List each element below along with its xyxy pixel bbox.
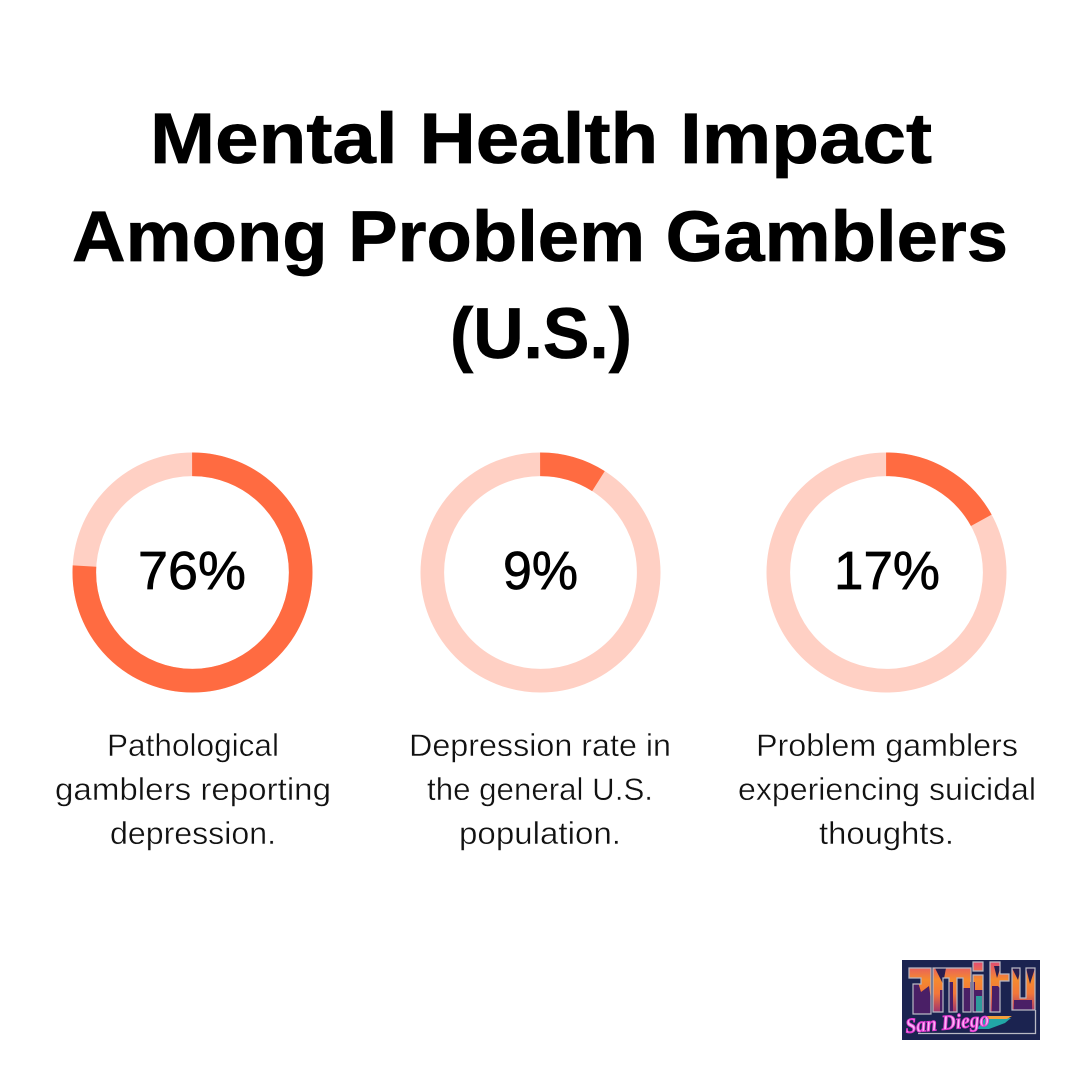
caption: depression rate	[409, 727, 671, 851]
title	[72, 100, 1008, 374]
logo outer frame line	[918, 1010, 1036, 1034]
title: Mental Health Impact	[150, 100, 932, 179]
logo beach	[977, 1018, 1011, 1029]
caption: depression rate: Depression rate in	[409, 727, 671, 763]
caption: pathological gamblers: depression.	[110, 815, 276, 851]
logo: Amity San Diego	[902, 960, 1040, 1040]
donut chart: 76%	[84, 464, 301, 681]
title: (U.S.)	[450, 295, 632, 374]
title: Among Problem Gamblers	[72, 198, 1008, 277]
donut chart: 17%	[778, 464, 995, 681]
logo script wordmark: San Diego	[904, 1007, 990, 1038]
panel: pathological gamblers 76%	[55, 464, 331, 851]
caption: pathological gamblers: Pathological	[107, 727, 279, 763]
value: 9%: 9%	[503, 541, 578, 601]
panel: general population 9%	[409, 464, 671, 851]
caption: suicidal thoughts: Problem gamblers	[756, 727, 1018, 763]
caption: pathological gamblers	[55, 727, 331, 851]
caption: pathological gamblers: gamblers reporting	[55, 771, 331, 807]
caption: depression rate: population.	[459, 815, 621, 851]
panel: suicidal thoughts 17%	[738, 464, 1036, 851]
caption: suicidal thoughts: experiencing suicidal	[738, 771, 1036, 807]
donut chart: 9%	[432, 464, 649, 681]
caption: depression rate: the general U.S.	[427, 771, 653, 807]
value: 76%: 76%	[138, 541, 246, 601]
value: 17%: 17%	[834, 541, 940, 601]
caption: suicidal thoughts	[738, 727, 1036, 851]
logo sunset letters	[905, 960, 1037, 1016]
caption: suicidal thoughts: thoughts.	[819, 815, 954, 851]
